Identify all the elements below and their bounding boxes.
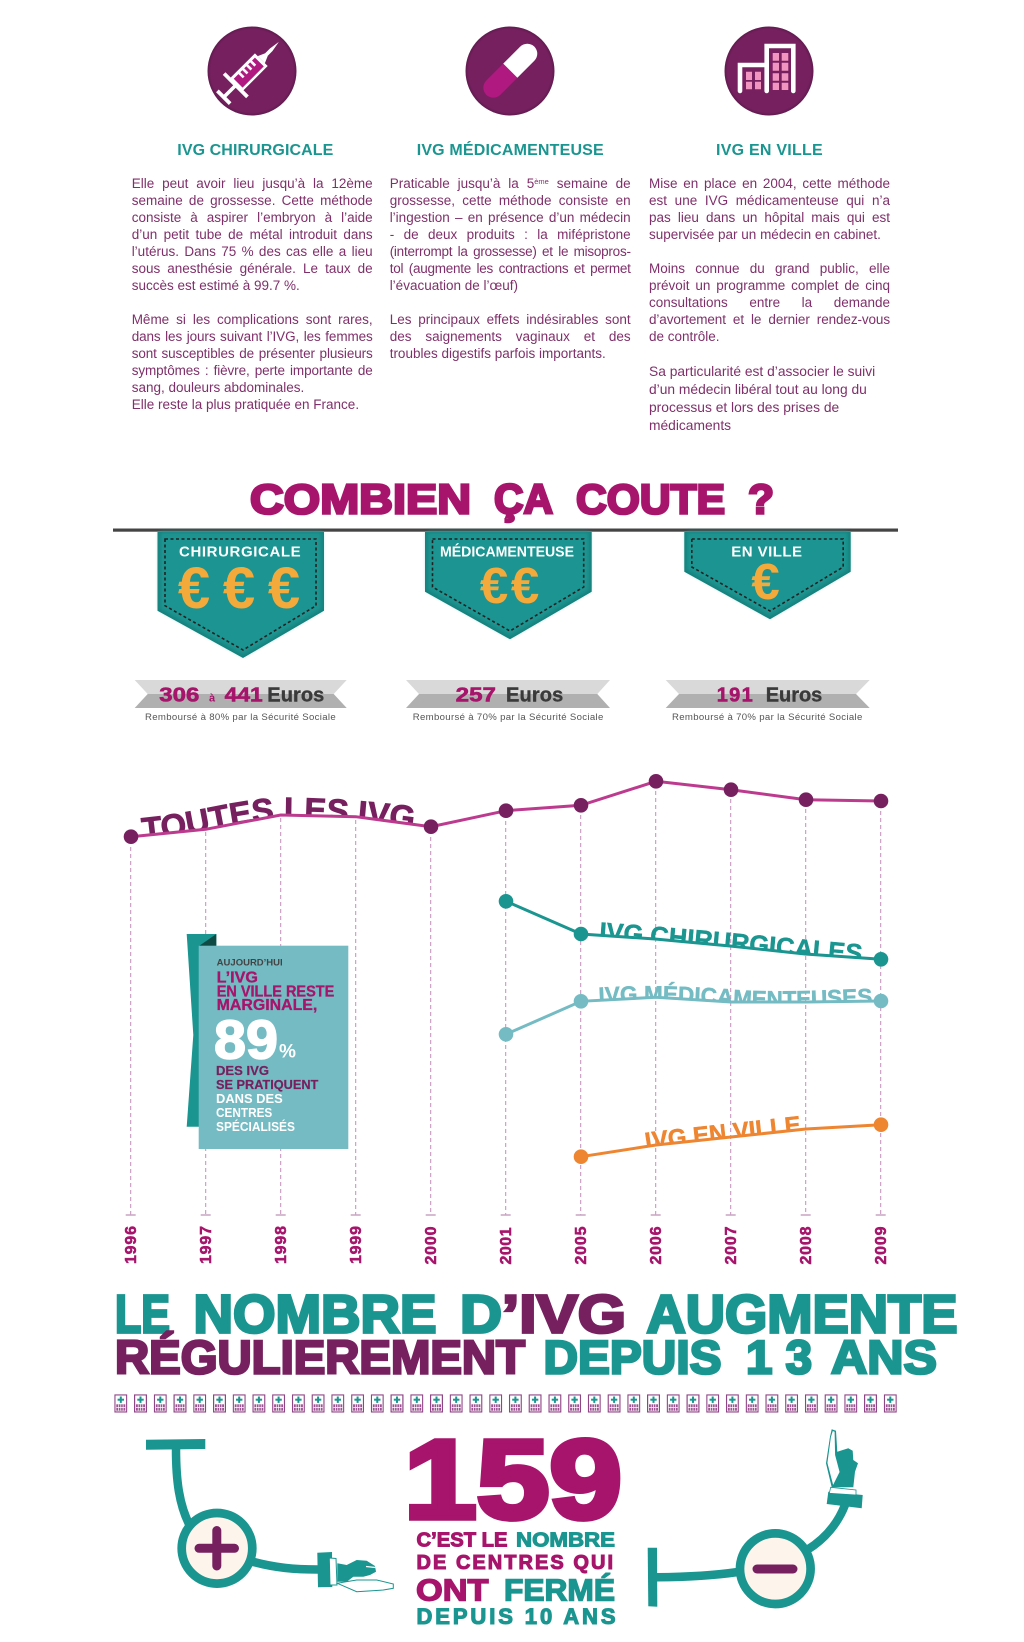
- text block: chirurgicale: sont susceptibles de présenter plusieurs: [132, 346, 373, 361]
- text block: chirurgicale: semaine de grossesse. Cette méthode: [132, 193, 373, 208]
- callout: 89 percent: CENTRES: [216, 1105, 273, 1120]
- text block: medicamenteuse: l’évacuation de l’œuf): [390, 278, 518, 293]
- text block: en ville: Mise en place en 2004, cette méthode: [649, 176, 890, 191]
- icon: minus with hand: [648, 1429, 863, 1607]
- text block: chirurgicale: sang, douleurs abdominales.: [132, 380, 304, 395]
- price ribbon: medicamenteuse: 257: [456, 684, 496, 706]
- text block: chirurgicale: l’utérus. Dans 75 % des cas elle a lieu: [132, 244, 373, 259]
- x axis years: 2000: [423, 1226, 440, 1264]
- text block: centres fermes: ONT: [416, 1572, 489, 1608]
- text block: medicamenteuse: [390, 176, 631, 361]
- text block: medicamenteuse: troubles digestifs parfois importants.: [390, 346, 606, 361]
- text block: en ville: pas lieu dans un hôpital mais qui est: [649, 210, 890, 225]
- headline: regulierement depuis 13 ans: [115, 1330, 937, 1384]
- price ribbon: medicamenteuse: [406, 680, 610, 723]
- horizontal rule: [113, 528, 898, 532]
- text block: en ville: supervisée par un médecin en cabinet.: [649, 227, 881, 242]
- series label: IVG medicamenteuses: IVG MÉDICAMENTEUSES: [599, 982, 872, 1000]
- callout: 89 percent: [187, 934, 348, 1149]
- title: combien ca coute: COUTE: [576, 476, 725, 522]
- text block: chirurgicale: sous anesthésie générale. Le taux de: [132, 261, 373, 276]
- series: IVG en ville: [574, 1117, 888, 1164]
- text block: chirurgicale: consiste à aspirer l’embryon à l’aide: [132, 210, 373, 225]
- price ribbon: medicamenteuse: Euros: [506, 684, 563, 706]
- text block: chirurgicale: Même si les complications sont rares,: [132, 312, 373, 327]
- headline: regulierement depuis 13 ans: ANS: [831, 1331, 937, 1384]
- text block: en ville: d’un médecin libéral tout au long du: [649, 382, 867, 397]
- text block: en ville: Moins connue du grand public, elle: [649, 261, 890, 276]
- panel: price tag chirurgicale: €: [268, 556, 300, 621]
- callout: 89 percent: SPÉCIALISÉS: [216, 1119, 295, 1134]
- series: IVG medicamenteuses: [499, 994, 888, 1042]
- callout: 89 percent: DANS DES: [216, 1091, 283, 1106]
- x axis years: 2007: [723, 1226, 740, 1264]
- headline: le nombre d'IVG augmente: D: [460, 1285, 502, 1344]
- callout: 89 percent: %: [279, 1042, 296, 1062]
- panel: price tag medicamenteuse: €: [511, 557, 539, 614]
- text block: chirurgicale: [132, 176, 373, 412]
- text block: en ville: prévoit un programme complet de cinq: [649, 278, 890, 293]
- text block: centres fermes: FERMÉ: [504, 1572, 615, 1608]
- text block: en ville: médicaments: [649, 418, 731, 433]
- panel: price tag medicamenteuse: €: [480, 557, 508, 614]
- panel: price tag medicamenteuse: MÉDICAMENTEUSE: [440, 544, 574, 561]
- panel: price tag chirurgicale: CHIRURGICALE: [179, 544, 301, 561]
- title: combien ca coute: COMBIEN: [250, 476, 471, 522]
- text block: en ville: de contrôle.: [649, 329, 720, 344]
- text block: chirurgicale: symptômes : fièvre, perte importante de: [132, 363, 373, 378]
- x axis years: 1996: [123, 1226, 140, 1264]
- big number 159: 159: [404, 1417, 622, 1542]
- panel: price tag en ville: [684, 532, 851, 619]
- x axis years: 2009: [873, 1226, 890, 1264]
- text block: en ville: Sa particularité est d’associer le suivi: [649, 364, 875, 379]
- icon: buildings: [724, 26, 814, 116]
- x axis years: 1999: [348, 1226, 365, 1264]
- x axis years: 2001: [498, 1227, 515, 1264]
- icon: pill: [466, 26, 554, 116]
- series: IVG chirurgicales: [499, 894, 888, 967]
- text block: chirurgicale: succès est estimé à 99.7 %.: [132, 278, 300, 293]
- headline: le nombre d'IVG augmente: ’IVG: [502, 1285, 626, 1344]
- text block: chirurgicale: dans les jours suivant l’IVG, les femmes: [132, 329, 373, 344]
- price ribbon: medicamenteuse: Remboursé à 70% par la Sécurité Sociale: [413, 712, 603, 723]
- panel: price tag en ville: €: [751, 553, 780, 610]
- text block: medicamenteuse: tol (augmente les contractions et permet: [390, 261, 631, 276]
- panel: price tag chirurgicale: [158, 532, 324, 658]
- x axis years: 2008: [798, 1226, 815, 1264]
- icon: plus with hand: [146, 1439, 393, 1592]
- series label: toutes les IVG: TOUTES LES IVG: [140, 797, 414, 834]
- headline: le nombre d'IVG augmente: [115, 1285, 958, 1344]
- text block: medicamenteuse: Praticable jusqu’à la 5ème semaine de: [390, 176, 631, 191]
- x axis years: 2006: [648, 1226, 665, 1264]
- series label: IVG en ville: IVG EN VILLE: [645, 1116, 799, 1145]
- line chart: IVG by year: [123, 774, 890, 1264]
- text block: centres fermes: DE CENTRES QUI: [416, 1552, 613, 1574]
- price ribbon: chirurgicale: 306: [159, 684, 199, 706]
- heading: IVG en ville: IVG EN VILLE: [716, 142, 823, 159]
- callout: 89 percent: DES IVG: [216, 1063, 269, 1078]
- title: combien ca coute: ?: [748, 476, 774, 522]
- panel: price tag chirurgicale: €: [178, 556, 210, 621]
- text block: medicamenteuse: (interrompt la grossesse) et le misopros-: [390, 244, 631, 259]
- title: combien ca coute: [250, 476, 774, 522]
- price ribbon: chirurgicale: 441: [225, 684, 263, 706]
- text block: en ville: est une IVG médicamenteuse qui n’a: [649, 193, 890, 208]
- price ribbon: chirurgicale: Euros: [267, 684, 324, 706]
- text block: medicamenteuse: - de deux produits : la mifépristone: [390, 227, 631, 242]
- headline: regulierement depuis 13 ans: 13: [746, 1331, 812, 1384]
- text block: chirurgicale: Elle peut avoir lieu jusqu’à la 12ème: [132, 176, 373, 191]
- text block: centres fermes: C’EST LE: [416, 1530, 508, 1552]
- x axis years: 1998: [273, 1226, 290, 1264]
- price ribbon: chirurgicale: à: [209, 692, 216, 704]
- text block: chirurgicale: d’un petit tube de métal introduit dans: [132, 227, 373, 242]
- callout: 89 percent: EN VILLE RESTE: [217, 984, 334, 1001]
- heading: IVG chirurgicale: IVG CHIRURGICALE: [177, 142, 334, 159]
- x axis years: [123, 1226, 890, 1264]
- text block: medicamenteuse: l’ingestion – en présence d’un médecin: [390, 210, 631, 225]
- price ribbon: en ville: [666, 680, 870, 723]
- price ribbon: en ville: 191: [717, 684, 753, 706]
- series label: IVG chirurgicales: IVG CHIRURGICALES: [600, 922, 862, 956]
- callout: 89 percent: SE PRATIQUENT: [216, 1077, 318, 1092]
- pictogram row: clinics: [115, 1395, 896, 1412]
- x axis years: 2005: [573, 1226, 590, 1264]
- text block: en ville: consultations entre la demande: [649, 295, 890, 310]
- callout: 89 percent: MARGINALE,: [217, 997, 317, 1014]
- x axis years: 1997: [198, 1226, 215, 1264]
- price ribbon: en ville: Remboursé à 70% par la Sécurité Sociale: [672, 712, 862, 723]
- price ribbon: chirurgicale: Remboursé à 80% par la Sécurité Sociale: [145, 712, 336, 723]
- series: toutes les IVG: [124, 774, 888, 844]
- callout: 89 percent: L’IVG: [217, 969, 258, 986]
- callout: 89 percent: AUJOURD’HUI: [217, 958, 283, 968]
- price ribbon: chirurgicale: [135, 680, 347, 723]
- text block: medicamenteuse: des saignements vaginaux et des: [390, 329, 631, 344]
- headline: regulierement depuis 13 ans: DEPUIS: [544, 1331, 722, 1384]
- headline: le nombre d'IVG augmente: AUGMENTE: [646, 1285, 958, 1344]
- icon: syringe: [208, 26, 296, 116]
- text block: centres fermes: [416, 1530, 616, 1629]
- panel: price tag medicamenteuse: [425, 532, 592, 639]
- headline: le nombre d'IVG augmente: LE: [115, 1285, 170, 1344]
- price ribbon: en ville: Euros: [766, 684, 822, 706]
- panel: price tag chirurgicale: €: [223, 556, 255, 621]
- headline: regulierement depuis 13 ans: RÉGULIEREMENT: [115, 1330, 525, 1384]
- text block: en ville: [649, 176, 890, 433]
- text block: chirurgicale: Elle reste la plus pratiquée en France.: [132, 397, 359, 412]
- text block: centres fermes: NOMBRE: [516, 1530, 615, 1552]
- heading: IVG medicamenteuse: IVG MÉDICAMENTEUSE: [417, 140, 604, 159]
- text block: medicamenteuse: grossesse, cette méthode consiste en: [390, 193, 631, 208]
- headline: le nombre d'IVG augmente: NOMBRE: [194, 1285, 436, 1344]
- text block: centres fermes: DEPUIS 10 ANS: [416, 1604, 616, 1629]
- text block: en ville: processus et lors des prises de: [649, 400, 839, 415]
- text block: en ville: d’avortement et le dernier rendez-vous: [649, 312, 890, 327]
- panel: price tag en ville: EN VILLE: [731, 544, 802, 561]
- title: combien ca coute: ÇA: [494, 476, 553, 522]
- text block: medicamenteuse: Les principaux effets indésirables sont: [390, 312, 631, 327]
- callout: 89 percent: 89: [214, 1008, 278, 1070]
